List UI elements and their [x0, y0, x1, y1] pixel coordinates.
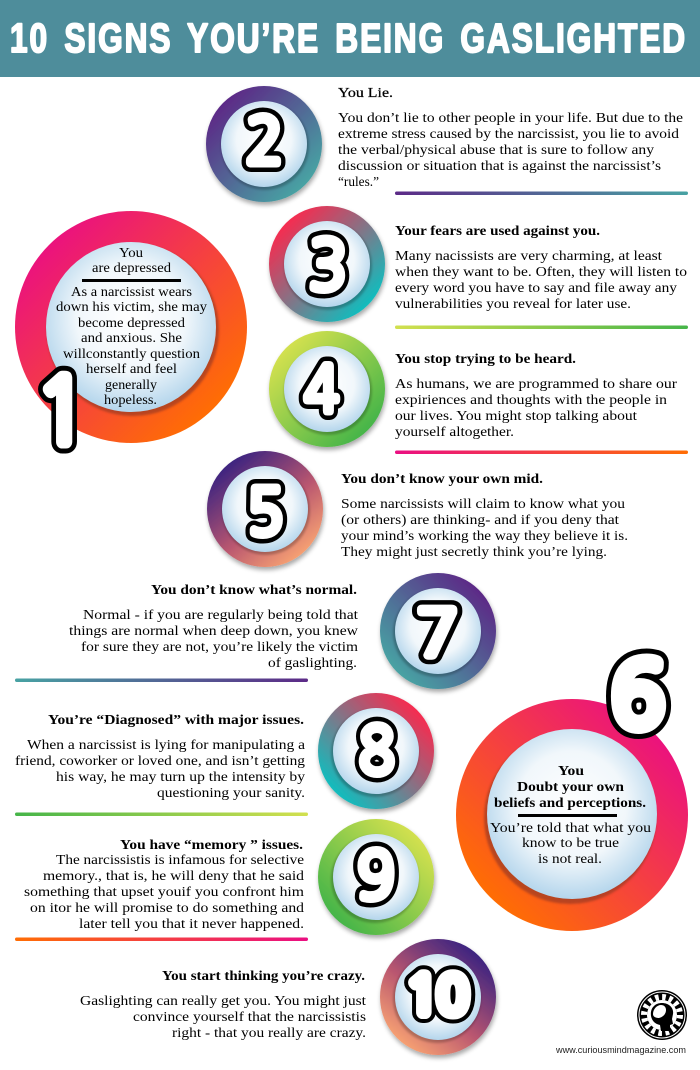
- heading: what's normal: You don’t know what’s normal.: [151, 583, 357, 598]
- heading: own mind: You don’t know your own mid.: [341, 472, 543, 487]
- panel: sign 7 what's normal: [15, 573, 496, 689]
- badge 8: 8: [359, 720, 394, 784]
- text block: sign 3 body: vulnerabilities you reveal for later use.: [395, 297, 631, 312]
- text block: sign 4 body: yourself altogether.: [395, 425, 514, 440]
- text block: sign 1 body: hopeless.: [104, 393, 157, 408]
- panel: sign 10 thinking you're crazy: [80, 939, 496, 1055]
- text block: sign 3 body: every word you have to say and file away any: [395, 281, 677, 296]
- text block: sign 6 body: [490, 821, 651, 867]
- badge 4: 4: [304, 358, 338, 420]
- divider bar 8: [15, 812, 308, 816]
- text block: sign 7 body: for sure they are not, you’re likely the victim: [81, 640, 358, 655]
- badge 9: 9: [358, 844, 394, 908]
- number 6: 6: [612, 652, 664, 739]
- text block: sign 7 body: of gaslighting.: [268, 656, 357, 671]
- badge 9: 9: [358, 844, 394, 908]
- number 1: 1: [36, 366, 87, 456]
- badge 3: 3: [309, 232, 347, 300]
- badge 5: [207, 451, 323, 567]
- badge 10: [380, 939, 496, 1055]
- heading: doubt your own beliefs: Doubt your own: [517, 780, 624, 795]
- text block: sign 5 body: [341, 497, 628, 560]
- text block: sign 2 body: the verbal/physical abuse that is sure to follow any: [338, 143, 654, 158]
- text block: sign 6 body: know to be true: [522, 836, 619, 851]
- text block: sign 9 body: on itor he will promise to do something and: [30, 901, 304, 916]
- badge 7: 7: [416, 602, 458, 666]
- heading: you are depressed: You: [119, 246, 143, 261]
- text block: sign 2 body: [338, 111, 683, 190]
- badge 4: [269, 331, 385, 447]
- badge 3: 3: [309, 232, 347, 300]
- text block: sign 1 body: become depressed: [78, 316, 185, 331]
- panel: sign 2 you lie: [206, 86, 688, 202]
- text block: sign 1 body: willconstantly question: [63, 347, 200, 362]
- text block: sign 8 body: questioning your sanity.: [157, 786, 305, 801]
- panel: sign 4 stop trying: [269, 331, 688, 454]
- panel: sign 8 diagnosed: [15, 693, 434, 816]
- text block: sign 1 body: and anxious. She: [81, 331, 182, 346]
- text block: sign 2 body: “rules.”: [338, 175, 379, 190]
- text block: sign 3 body: [395, 249, 687, 312]
- text block: sign 9 body: [24, 853, 304, 932]
- heading: memory issues: You have “memory ” issues.: [120, 838, 303, 853]
- badge 3: [269, 206, 385, 322]
- text block: sign 1 body: generally: [105, 378, 157, 393]
- text block: sign 5 body: (or others) are thinking- and if you deny that: [341, 513, 619, 528]
- title banner: [0, 0, 700, 77]
- divider bar 3: [395, 326, 688, 329]
- text block: sign 6 body: is not real.: [538, 852, 602, 867]
- heading: your fears: Your fears are used against you.: [395, 224, 600, 239]
- icon: curious mind magazine logo: [637, 990, 687, 1040]
- heading: doubt your own beliefs: beliefs and perceptions.: [494, 796, 646, 811]
- heading: you are depressed: are depressed: [92, 261, 171, 276]
- text block: sign 8 body: his way, he may turn up the intensity by: [56, 770, 305, 785]
- text block: sign 7 body: Normal - if you are regularly being told that: [83, 608, 358, 623]
- text block: sign 4 body: our lives. You might stop talking about: [395, 409, 637, 424]
- text block: sign 7 body: [69, 608, 359, 671]
- badge 10: 10: [407, 971, 468, 1021]
- badge 10: 10: [407, 971, 468, 1021]
- heading: stop trying: You stop trying to be heard.: [395, 352, 576, 367]
- text block: sign 1 body: [56, 285, 207, 408]
- text block: sign 5 body: Some narcissists will claim to know what you: [341, 497, 625, 512]
- heading: doubt your own beliefs: [494, 764, 646, 817]
- text block: sign 1 body: As a narcissist wears: [71, 285, 192, 300]
- text block: sign 8 body: When a narcissist is lying for manipulating a: [27, 738, 306, 753]
- badge 5: 5: [248, 482, 284, 544]
- badge 2: 2: [246, 110, 283, 174]
- number 1: 1: [36, 366, 87, 456]
- text block: sign 9 body: something that upset youif you confront him: [24, 885, 304, 900]
- text block: sign 6 body: You’re told that what you: [490, 821, 651, 836]
- text block: sign 9 body: memory., that is, he will deny that he said: [43, 869, 304, 884]
- divider bar 2: [395, 192, 688, 195]
- heading: you are depressed: [82, 246, 181, 282]
- panel: sign 5 your own mind: [207, 451, 628, 567]
- text block: sign 9 body: later tell you that it never happened.: [79, 917, 304, 932]
- panel: sign 6 doubt your beliefs: [456, 652, 688, 931]
- text block: sign 2 body: extreme stress caused by the narcissist, you lie to avoid: [338, 127, 679, 142]
- panel: sign 1 you are depressed: [15, 211, 247, 456]
- text block: sign 10 body: convince yourself that the narcissistis: [133, 1010, 366, 1025]
- panel: sign 9 memory issues: [15, 819, 434, 941]
- text block: sign 8 body: friend, coworker or loved one, and isn’t getting: [15, 754, 305, 769]
- text block: sign 3 body: when they want to be. Often, they will listen to: [395, 265, 687, 280]
- badge 5: 5: [248, 482, 284, 544]
- badge 9: [318, 819, 434, 935]
- text block: sign 8 body: [15, 738, 306, 801]
- text block: sign 5 body: They might just secretly think you’re lying.: [341, 545, 607, 560]
- badge 4: 4: [304, 358, 338, 420]
- badge 7: 7: [416, 602, 458, 666]
- text block: sign 10 body: Gaslighting can really get you. You might just: [80, 994, 366, 1009]
- text block: sign 3 body: Many nacissists are very charming, at least: [395, 249, 662, 264]
- text block: sign 4 body: [395, 377, 677, 440]
- heading: thinking crazy: You start thinking you’re crazy.: [162, 969, 365, 984]
- text block: sign 5 body: your mind’s working the way they believe it is.: [341, 529, 628, 544]
- text block: sign 4 body: As humans, we are programmed to share our: [395, 377, 677, 392]
- text block: sign 1 body: down his victim, she may: [56, 300, 207, 315]
- panel: sign 3 your fears: [269, 206, 688, 329]
- heading: you lie: You Lie.: [338, 86, 393, 101]
- text block: sign 10 body: [80, 994, 366, 1041]
- text block: sign 2 body: discussion or situation that is against the narcissist’s: [338, 159, 661, 174]
- badge 8: 8: [359, 720, 394, 784]
- badge 2: [206, 86, 322, 202]
- badge 7: [380, 573, 496, 689]
- badge 2: 2: [246, 110, 283, 174]
- text block: sign 7 body: things are normal when deep down, you knew: [69, 624, 359, 639]
- divider bar 9: [15, 938, 308, 941]
- text block: sign 2 body: You don’t lie to other people in your life. But due to the: [338, 111, 683, 126]
- website url: www.curiousmindmagazine.com: [555, 1045, 686, 1055]
- text block: sign 10 body: right - that you really are crazy.: [172, 1026, 366, 1041]
- number 6: 6: [612, 652, 664, 739]
- text block: sign 4 body: expiriences and thoughts with the people in: [395, 393, 667, 408]
- heading: diagnosed: You’re “Diagnosed” with major issues.: [48, 713, 304, 728]
- divider bar 7: [15, 678, 308, 682]
- heading: doubt your own beliefs: You: [558, 764, 584, 779]
- text block: sign 1 body: herself and feel: [86, 362, 177, 377]
- divider bar 4: [395, 450, 688, 454]
- badge 8: [318, 693, 434, 809]
- text block: sign 9 body: The narcissistis is infamous for selective: [56, 853, 304, 868]
